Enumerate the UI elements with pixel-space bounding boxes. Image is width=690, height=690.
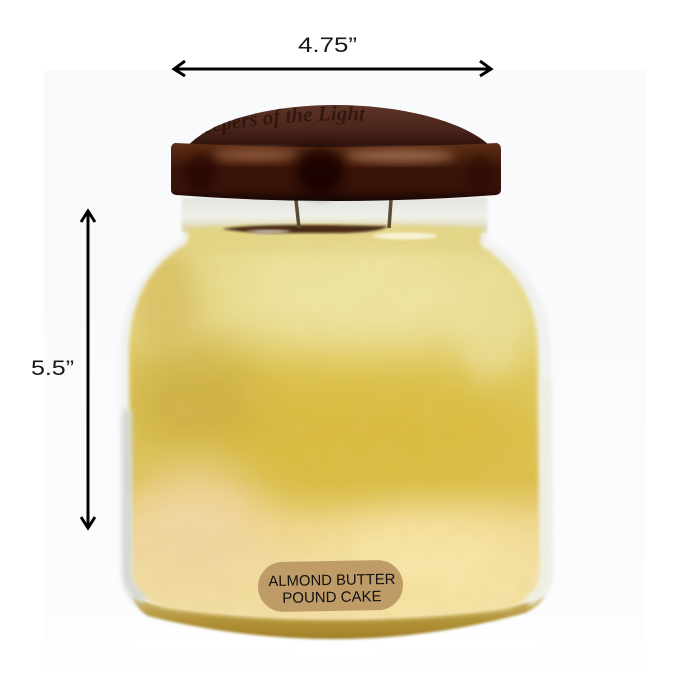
lid rim bbox=[171, 143, 501, 201]
wax mottled texture bbox=[426, 408, 434, 416]
product label: POUND CAKE bbox=[282, 588, 382, 607]
lid right dark reflection bbox=[467, 154, 493, 190]
width arrow bbox=[174, 61, 491, 76]
lid embossed text: Keepers of the Light bbox=[202, 106, 366, 135]
lid centre dark reflection bbox=[296, 148, 344, 196]
glass jar body bbox=[120, 198, 553, 638]
photo background bbox=[44, 70, 645, 668]
wax golden cloud bbox=[150, 368, 540, 492]
neck glass bbox=[182, 198, 487, 232]
height label: 5.5” bbox=[31, 357, 74, 380]
wax light lower patch bbox=[345, 487, 510, 563]
wax left shoulder shade bbox=[133, 245, 197, 355]
candle jar bbox=[119, 105, 554, 642]
wax pale upper cloud bbox=[230, 245, 490, 335]
left wick bbox=[296, 200, 299, 228]
glass right edge bbox=[528, 380, 546, 602]
wax olive left band bbox=[120, 340, 260, 450]
jar base band bbox=[132, 596, 544, 639]
lid dome bbox=[186, 105, 492, 148]
product label bbox=[258, 560, 403, 612]
wax melt pool bbox=[222, 225, 388, 233]
wax darker top rim bbox=[248, 232, 462, 252]
lid left dark reflection bbox=[184, 154, 216, 190]
wax fill bbox=[120, 220, 550, 630]
candle product infographic bbox=[32, 38, 554, 642]
lid rim highlights bbox=[184, 148, 493, 196]
wax pale right shoulder bbox=[454, 294, 525, 388]
right wick bbox=[389, 200, 391, 228]
height arrow bbox=[81, 211, 95, 528]
width label: 4.75” bbox=[298, 34, 357, 57]
wax white spot bbox=[373, 232, 437, 240]
wax peach lower patch bbox=[125, 465, 265, 595]
lid bbox=[171, 105, 501, 204]
white glow around the jar bbox=[95, 628, 575, 656]
melt pool highlight bbox=[245, 230, 292, 234]
label text: ALMOND BUTTER bbox=[268, 571, 396, 590]
glass left edge bbox=[127, 410, 144, 600]
